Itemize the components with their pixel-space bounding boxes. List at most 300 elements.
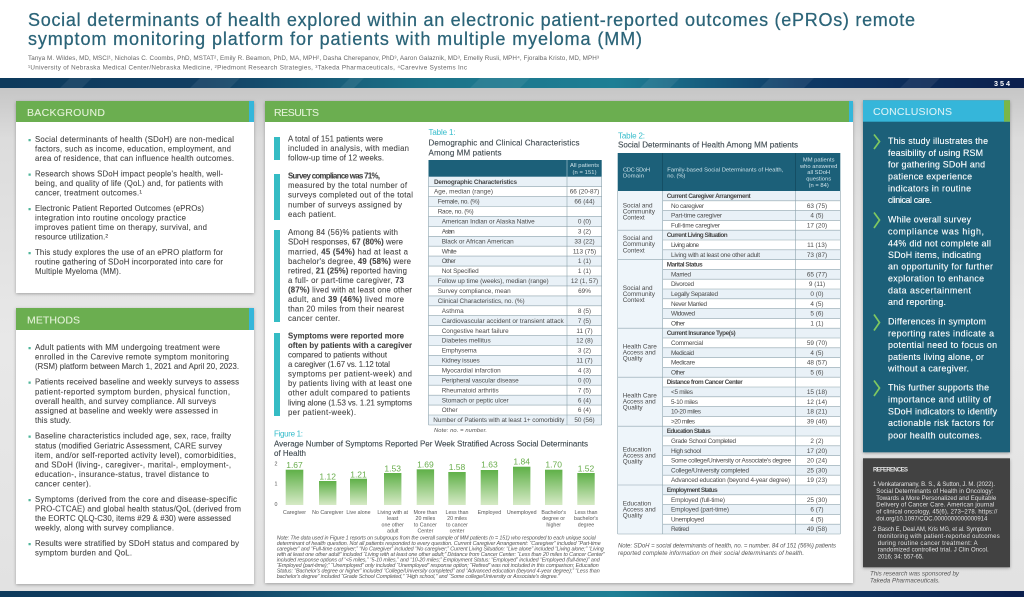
table 1 header row: (n = 151) (572, 170, 597, 176)
table 2 rows: 59 (70) (807, 340, 827, 347)
bar: less than 20 miles: center (450, 529, 465, 535)
conclusion 4: importance and utility of (888, 394, 992, 404)
conclusion 2: an opportunity for further (888, 262, 993, 272)
title: Social determinants of health explored within an electronic patient-reported outcomes (ePROs) remote (28, 10, 915, 30)
table 2 domain column: Social and (623, 202, 653, 209)
conclusion 1: This study illustrates the (888, 136, 988, 146)
table 1 header row: All patients (570, 163, 599, 169)
bar: living with at least one other adult: least (387, 516, 399, 522)
conclusion 1: indicators in routine (888, 183, 971, 193)
table 2 rows: Married (671, 271, 691, 278)
conclusion 3: without a caregiver. (887, 364, 969, 374)
figure 1 note: bachelor's degree” included “Grade School Completed,” “High school,” and “Some college/University or Associate's degree.” (277, 574, 560, 580)
methods bullet text: this study. (35, 416, 71, 425)
table 2 note (618, 544, 836, 557)
top colour band with poster number (0, 78, 1024, 88)
background bullet text: integration into routine oncology practice (35, 214, 186, 222)
results text: symptoms reported: living alone (1.53 vs. 1.21 symptoms (288, 398, 412, 407)
table 1: demographic and clinical characteristics: Other (442, 258, 457, 265)
table 2 rows: Retired (671, 526, 689, 533)
heading: results: RESULTS (274, 107, 319, 119)
sponsor note: Takeda Pharmaceuticals. (870, 578, 940, 585)
table 1: demographic and clinical characteristics: 0 (0) (578, 218, 591, 226)
table 1: demographic and clinical characteristics: Female, no. (%) (438, 199, 480, 206)
table 2 rows: Current Insurance Type(s) (667, 330, 736, 337)
table 2 heading (618, 131, 798, 150)
table 2 rows: 65 (77) (807, 271, 827, 278)
bar: more than 20 miles (413, 459, 437, 535)
table 1: demographic and clinical characteristics: Diabetes mellitus (442, 338, 491, 345)
results text: patients included: A total of 151 patients were (288, 134, 383, 144)
table 2 header row (618, 153, 840, 191)
conclusion 2: and reporting. (888, 297, 946, 307)
results text: symptoms reported (274, 332, 412, 417)
table 2 domain column: Community (623, 291, 656, 298)
table 1: demographic and clinical characteristics: 0 (0) (578, 377, 591, 384)
table 2 rows: Distance from Cancer Center (667, 379, 743, 386)
reference 2: 2016; 34: 557-65. (878, 554, 924, 560)
background bullet text: Electronic Patient Reported Outcomes (ePROs) (35, 204, 204, 213)
conclusion 3: Differences in symptom (888, 316, 986, 326)
panel: references (863, 458, 1010, 567)
conclusion 1: patience experience (888, 171, 972, 181)
bar chart: average symptoms per week (275, 457, 598, 535)
background bullet text: Social determinants of health (SDoH) are non-medical (35, 135, 234, 144)
bar: live alone (346, 470, 371, 516)
table 1: demographic and clinical characteristics: 50 (56) (574, 417, 595, 424)
table 2 heading: Social Determinants of Health Among MM patients (618, 141, 798, 150)
table 2 rows: No caregiver (671, 203, 705, 210)
methods bullet text: symptom burden and QoL. (35, 549, 132, 558)
conclusion 1: feasibility of using RSM (888, 148, 983, 158)
results text: symptoms reported: symptoms per patient-week) and (288, 370, 412, 379)
table 2 header row: who answered (799, 164, 837, 170)
results text: SDoH responses: retired, 21 (25%) reported having (288, 266, 407, 275)
table 1: demographic and clinical characteristics: Cardiovascular accident or transient attack (442, 318, 564, 325)
figure 1 note: Status: “Bachelor's degree or higher” included “College/University completed” and “Advanced education (beyond 4-year degree);” “Less than (277, 569, 600, 575)
conclusion 2: While overall survey (888, 215, 972, 225)
authors and affiliations: ¹University of Nebraska Medical Center/Nebraska Medicine, ²Piedmont Research Strategies, ³Takeda Pharmaceuticals, ⁴Carevive Systems Inc (28, 64, 467, 72)
table 2 domain column: Education (623, 501, 652, 508)
methods bullet text: Adult patients with MM undergoing treatment were (35, 343, 220, 352)
figure 1 note: with at least one other adult” included “Living with at least one other adult;” Distance from Cancer Center: “Less than 20 miles to Cancer Center” (277, 552, 605, 558)
table 2 rows: Employed (full-time) (671, 497, 725, 504)
table 2 rows: 4 (5) (810, 516, 824, 523)
conclusion 4: actionable risk factors for (888, 418, 994, 428)
reference 2: randomized controlled trial. J Clin Oncol. (878, 548, 989, 554)
results text: SDoH responses: a full- or part-time caregiver, 73 (288, 276, 405, 285)
table 1: demographic and clinical characteristics: 6 (4) (578, 407, 591, 414)
background bullet text (28, 135, 234, 276)
table 1: demographic and clinical characteristics: Rheumatoid arthritis (442, 387, 499, 394)
reference 1 (873, 482, 998, 522)
results text: symptoms reported: a caregiver (1.67 vs. 1.12 total (288, 360, 390, 369)
bar: caregiver (283, 460, 306, 516)
results text: SDoH responses: bachelor's degree, 49 (58%) were (288, 257, 411, 266)
y axis labels (275, 462, 278, 508)
table 1: demographic and clinical characteristics: Not Specified (442, 268, 479, 275)
results text: survey compliance: surveys completed out of the total (288, 191, 413, 200)
table 2 rows: 6 (7) (810, 507, 824, 514)
table 1: demographic and clinical characteristics: Kidney issues (442, 358, 480, 364)
authors and affiliations: Tanya M. Wildes, MD, MSCI¹, Nicholas C. Coombs, PhD, MSTAT², Emily R. Beamon, PhD, MA, MPH², Dasha Cherepanov, PhD³, Aaron Galaznik, MD³, Emelly Rusli, MPH⁴, Fjoralba Kristo, MD, MPH³ (28, 55, 599, 62)
table 2 rows: Marital Status (667, 262, 703, 269)
bar: more than 20 miles: to Cancer (414, 522, 437, 528)
table 2 rows (667, 193, 827, 533)
table 1: demographic and clinical characteristics: 33 (22) (574, 238, 595, 245)
table 1: demographic and clinical characteristics: 6 (4) (578, 397, 591, 404)
table 2 rows: Medicare (671, 360, 695, 367)
table 2 domain column: Quality (623, 356, 643, 363)
figure 1 heading (274, 430, 588, 458)
table 2 header row: Domain (623, 174, 644, 180)
bar: live alone: 1.21 (350, 470, 367, 480)
bar: no caregiver: No Caregiver (312, 510, 344, 516)
table 2 domain column: Health Care (623, 393, 657, 400)
table 2 domain column: Access and (623, 453, 656, 460)
table 2 domain column: Context (623, 297, 645, 304)
table 2 heading: Table 2: (618, 131, 645, 140)
bar: caregiver: 1.67 (286, 460, 303, 470)
background bullet text: improves patient time on therapy, survival, and (35, 223, 207, 232)
table 1: demographic and clinical characteristics: Clinical Characteristics, no. (%) (438, 298, 525, 305)
bar: no caregiver (312, 472, 344, 516)
bar: bachelor's degree or higher: 1.70 (545, 459, 562, 469)
table 1: demographic and clinical characteristics: Congestive heart failure (442, 328, 509, 335)
conclusion 2: 44% did not complete all (888, 238, 991, 248)
table 2 rows: >20 miles (671, 418, 695, 425)
table 1: demographic and clinical characteristics: Survey compliance, mean (438, 288, 511, 295)
table 2 rows: 19 (23) (807, 477, 827, 484)
table 1 header row (428, 160, 602, 177)
results text: survey compliance: each patient. (288, 210, 336, 219)
table 1: demographic and clinical characteristics: 11 (7) (576, 328, 593, 335)
reference 2: monitoring with patient-reported outcomes (878, 534, 1000, 540)
bar: less than bachelor's degree: 1.52 (578, 464, 595, 474)
table 2 rows: Part-time caregiver (671, 213, 723, 220)
bar: less than 20 miles (446, 462, 469, 535)
table 2 rows: 48 (57) (807, 360, 827, 367)
background bullet text: factors, such as income, education, employment, and (35, 144, 231, 154)
table 1: demographic and clinical characteristics: Asian (442, 228, 455, 236)
table 1: demographic and clinical characteristics: 12 (8) (576, 338, 593, 345)
results text: survey compliance (274, 172, 413, 220)
bar: caregiver: Caregiver (283, 510, 306, 516)
bar: employed (478, 460, 501, 516)
reference 1: Towards a More Personalized and Equitable (876, 496, 997, 502)
table 2 rows: 0 (0) (810, 291, 824, 298)
figure 1 heading: Figure 1: (274, 430, 303, 439)
results text: patients included: follow-up time of 12 weeks. (288, 154, 384, 163)
conclusion 3 (874, 314, 997, 374)
table 2 rows: <5 miles (671, 389, 693, 396)
table 1: demographic and clinical characteristics (428, 160, 602, 425)
results text: SDoH responses (274, 228, 412, 323)
table 2 domain column: Context (623, 248, 645, 254)
bar: less than 20 miles: to cancer (446, 522, 468, 528)
reference 2 (873, 527, 1000, 560)
table 2 header row: Family-based Social Determinants of Health, (667, 168, 784, 174)
table 2 header row: (n = 84) (809, 183, 829, 189)
y axis labels: 1 (275, 482, 278, 488)
conclusion 4: SDoH indicators to identify (888, 406, 998, 416)
table 2 domain column: Social and (623, 235, 653, 242)
table 2 rows: Current Caregiver Arrangement (667, 193, 752, 200)
table 1: demographic and clinical characteristics: Other (442, 407, 459, 414)
methods bullet text: cancer center). (35, 480, 91, 488)
figure 1 note: “Employed (part-time);” “Unemployed” only included “Unemployed” response option; “Retired” was not included in this comparison; Education (277, 563, 599, 569)
methods bullet text: status (modified Geriatric Assessment, CARE survey (35, 441, 222, 450)
table 2 domain column: Quality (623, 459, 643, 466)
results text: symptoms reported: by patients living with at least one (288, 379, 412, 388)
table 1: demographic and clinical characteristics: 3 (2) (578, 348, 591, 355)
bar: less than 20 miles: 1.58 (449, 462, 466, 472)
panel: conclusions (863, 100, 1010, 452)
conclusion 1: clinical care. (888, 195, 932, 205)
bar: less than bachelor's degree (574, 464, 598, 528)
table 2 header row: MM patients (803, 158, 835, 164)
table 2 note: reported complete information on their social determinants of health. (618, 551, 804, 557)
table 1: demographic and clinical characteristics: Peripheral vascular disease (442, 377, 519, 384)
table 1: demographic and clinical characteristics: Age, median (range) (434, 189, 493, 196)
background bullet text: area of residence, that can influence health outcomes. (35, 154, 234, 163)
table 1: demographic and clinical characteristics: Asthma (442, 308, 464, 315)
results text: SDoH responses: (87%) lived with at least one other (288, 286, 412, 294)
table 2 rows: Full-time caregiver (671, 222, 721, 229)
table 2 rows: Never Married (671, 301, 707, 308)
table 2 rows: 15 (18) (807, 389, 827, 396)
table 2 rows: 12 (14) (807, 399, 827, 406)
table 2 rows: Employed (part-time) (671, 507, 729, 514)
sponsor note: This research was sponsored by (870, 570, 960, 577)
table 1: demographic and clinical characteristics: 7 (5) (578, 387, 591, 394)
table 2 rows: Other (671, 369, 686, 376)
results text: symptoms reported: compared to patients without (288, 351, 388, 360)
table 1: demographic and clinical characteristics: 7 (5) (578, 318, 591, 325)
reference 1: Social Determinants of Health in Oncology: (876, 489, 994, 495)
background bullet text: routine gathering of SDoH incorporated into care for (35, 258, 223, 266)
table 2 header row: questions (806, 176, 831, 182)
bottom colour band (0, 591, 1024, 597)
sponsor note (870, 570, 960, 585)
table 2 domain column: Access and (623, 399, 656, 406)
methods bullet text: PRO-CTCAE) and global health status/QoL (derived from (35, 504, 241, 514)
table 2 rows: High school (671, 448, 701, 455)
table 1: demographic and clinical characteristics: White (442, 248, 457, 255)
bar: unemployed (507, 457, 537, 516)
table 1: demographic and clinical characteristics: Myocardial infarction (442, 368, 501, 374)
heading: references: REFERENCES (873, 468, 908, 474)
table 1: demographic and clinical characteristics: 66 (44) (574, 199, 595, 206)
table 1: demographic and clinical characteristics: 8 (5) (578, 308, 591, 315)
table 2 domain column: Context (623, 214, 645, 221)
results text: survey compliance: measured by the total number of (288, 181, 408, 190)
table 2 domain column: Community (623, 208, 656, 215)
methods bullet text: enrolled in the Carevive remote symptom monitoring (35, 352, 229, 362)
background bullet text: This study explores the use of an ePRO platform for (35, 248, 223, 257)
results text: patients included (274, 134, 409, 163)
results text: symptoms reported: Symptoms were reported more (288, 332, 405, 340)
reference 2: during routine cancer treatment: A (878, 541, 978, 547)
bar: living with at least one other adult: 1.53 (384, 463, 401, 473)
reference 1: of clinical oncology, 45(6), 273–278. https:// (876, 509, 998, 515)
table 2 rows: Current Living Situation (667, 232, 728, 239)
table 2 rows: 4 (5) (810, 213, 824, 220)
bar: employed: Employed (478, 510, 501, 516)
table 2 rows: 73 (87) (807, 252, 827, 259)
results text: symptoms reported: other adult compared to patients (288, 389, 410, 398)
figure 1 note: determinant of health question. Not all patients responded to every question. Current Caregiver Arrangement: “Caregiver” included “Part-time (277, 541, 601, 547)
table 1: demographic and clinical characteristics: 69% (578, 288, 591, 295)
table 2 domain column (623, 202, 657, 520)
bar: living with at least one other adult: adult (387, 529, 399, 535)
table 2 rows: Commercial (671, 340, 703, 347)
table 2 rows: 39 (46) (807, 418, 827, 425)
methods bullet text: patient-reported symptom burden, physical function, (35, 387, 230, 396)
table 2 domain column: Quality (623, 513, 643, 520)
table 2 rows: 10-20 miles (671, 409, 701, 416)
figure 1 note: Note: The data used in Figure 1 reports on subgroups from the overall sample of MM patients (n = 151) who responded to each unique social (277, 536, 596, 542)
table 2 header row: no. (%) (667, 174, 685, 180)
table 1: demographic and clinical characteristics: 4 (3) (578, 368, 591, 374)
bar: more than 20 miles: 20 miles (416, 516, 436, 522)
table 1: demographic and clinical characteristics: 12 (1, 57) (571, 278, 598, 285)
table 1: demographic and clinical characteristics: 1 (1) (578, 258, 591, 265)
table 2 rows: 11 (13) (807, 242, 827, 249)
table 1: demographic and clinical characteristics: Follow up time (weeks), median (range) (438, 278, 549, 285)
table 2 domain column: Education (623, 447, 652, 454)
conclusion 2 (874, 212, 993, 307)
table 2 rows: 4 (5) (810, 350, 824, 357)
table 2 domain column: Health Care (623, 344, 657, 351)
bar: bachelor's degree or higher: higher (546, 522, 561, 528)
results text: symptoms reported: often by patients with a caregiver (288, 341, 412, 350)
methods bullet text: Baseline characteristics included age, sex, race, frailty (35, 432, 231, 441)
results text: SDoH responses: married, 45 (54%) had at least a (288, 247, 409, 256)
conclusion 4: This further supports the (888, 383, 989, 393)
results text: SDoH responses: SDoH responses, 67 (80%) were (288, 238, 403, 247)
y axis labels: 2 (275, 462, 278, 468)
methods bullet text: assigned at baseline and weekly were assessed in (35, 406, 218, 416)
bar: no caregiver: 1.12 (319, 472, 336, 482)
results text: SDoH responses: than 20 miles from their nearest (288, 305, 405, 314)
reference 1: doi.org/10.1097/COC.0000000000000914 (876, 516, 988, 522)
conclusion 3: potential need to focus on (888, 340, 997, 350)
conclusion 4 (874, 380, 998, 440)
bar: bachelor's degree or higher (541, 459, 566, 528)
table 2 rows: Grade School Completed (671, 438, 736, 445)
bar: unemployed: 1.84 (513, 457, 530, 467)
top colour band with poster number: 354 (994, 79, 1010, 88)
results text: symptoms reported: per patient-week). (288, 408, 356, 417)
table 2 domain column: Social and (623, 285, 653, 292)
table 2 domain column: Quality (623, 405, 643, 412)
table 2 rows: Legally Separated (671, 291, 718, 298)
table 2 rows: 49 (58) (807, 526, 827, 533)
table 2 rows: Some college/University or Associate's degree (671, 458, 791, 465)
table 1 heading: Among MM patients (428, 149, 502, 158)
table 2 rows: 5 (6) (810, 369, 824, 376)
bar: unemployed: Unemployed (507, 510, 537, 516)
authors and affiliations (28, 55, 599, 72)
panel: results (265, 101, 853, 583)
background bullet text: cancer, treatment outcomes.¹ (35, 188, 142, 198)
table 1 heading: Demographic and Clinical Characteristics (428, 138, 580, 147)
table 2 rows: 20 (24) (807, 458, 827, 465)
conclusion 1 (874, 134, 988, 205)
background bullet text: Research shows SDoH impact people's health, well- (35, 170, 223, 178)
title (28, 10, 915, 49)
table 1 heading: Table 1: (428, 128, 456, 137)
bar: bachelor's degree or higher: Bachelor's (541, 510, 566, 516)
heading: background: BACKGROUND (27, 107, 105, 119)
figure 1 note: included response options of “<5 miles,” “5-10 miles,” and “10-20 miles;” Employment Status: “Employed” included “Employed (full-time)” and (277, 558, 601, 564)
table 2 rows: Unemployed (671, 516, 704, 523)
table 2 rows: 5 (6) (810, 311, 824, 318)
methods bullet text: and SDoH (living-, caregiver-, marital-, employment-, (35, 460, 231, 470)
table 2 rows: 18 (21) (807, 409, 827, 416)
results text: SDoH responses: cancer center. (288, 314, 340, 323)
table 1: demographic and clinical characteristics: Stomach or peptic ulcer (442, 397, 510, 404)
table 1: demographic and clinical characteristics: Race, no. (%) (438, 209, 474, 216)
table 2 rows: Living alone (671, 242, 699, 249)
table 2 note: Note: SDoH = social determinants of health, no. = number. 84 of 151 (56%) patients (618, 544, 836, 550)
table 1: demographic and clinical characteristics: Demographic Characteristics (434, 179, 517, 186)
reference 1: 1 Venkataramany, B. S., & Sutton, J. M. (2022). (873, 482, 995, 488)
title: symptom monitoring platform for patients with multiple myeloma (MM) (28, 29, 642, 49)
table 1 heading (428, 128, 580, 158)
methods bullet text: Symptoms (derived from the core and disease-specific (35, 495, 237, 504)
bar: more than 20 miles: Center (417, 529, 434, 535)
table 2 rows: 17 (20) (807, 222, 827, 229)
results text: survey compliance: number of surveys assigned by (288, 200, 402, 209)
methods bullet text: weekly, along with survey compliance. (34, 524, 174, 532)
table 1: demographic and clinical characteristics: Black or African American (442, 238, 514, 245)
table 2 rows: 17 (20) (807, 448, 827, 455)
bar: more than 20 miles: More than (413, 510, 437, 516)
conclusion 2: compliance was high, (888, 226, 984, 236)
table 1: demographic and clinical characteristics: Number of Patients with at least 1+ comorbidity (433, 417, 565, 424)
conclusion 2: data ascertainment (888, 285, 972, 295)
table 2 domain column: Access and (623, 507, 656, 514)
table 1: demographic and clinical characteristics: 113 (75) (573, 248, 596, 255)
table 2 rows: 2 (2) (810, 438, 824, 445)
figure 1 note (277, 536, 605, 580)
table 2 rows: 25 (30) (807, 497, 827, 504)
table 2 domain column: Access and (623, 350, 656, 357)
methods bullet text: Results were stratified by SDoH status and compared by (35, 539, 239, 548)
table 1: demographic and clinical characteristics: 3 (2) (578, 228, 591, 236)
methods bullet text: the EORTC QLQ-C30, items #29 & #30) were assessed (35, 514, 231, 523)
methods bullet text: overall health, and survey compliance. All surveys (35, 397, 216, 406)
table 2 header row: CDC SDoH (623, 168, 650, 174)
background bullet text: resource utilization.² (35, 232, 108, 242)
panel: methods (16, 308, 254, 584)
bar: less than bachelor's degree: bachelor's (574, 516, 598, 522)
table 2 rows: Living with at least one other adult (671, 252, 760, 259)
bar: living with at least one other adult: one other (382, 522, 404, 528)
conclusion 2: exploration to enhance (888, 273, 984, 283)
background bullet text: Multiple Myeloma (MM). (35, 267, 121, 276)
conclusion 3: reporting rates indicate a (888, 328, 994, 338)
reference 1: Delivery of Cancer Care. American journal (876, 502, 994, 508)
table 2 rows: Medicaid (671, 350, 694, 357)
table 2 rows: Other (671, 320, 686, 327)
bar: living with at least one other adult: Living with at (377, 510, 409, 516)
panel: background (16, 101, 254, 293)
reference 2: 2 Basch E, Deal AM, Kris MG, et al. Symptom (873, 527, 991, 533)
table 2 rows: 5-10 miles (671, 399, 698, 406)
